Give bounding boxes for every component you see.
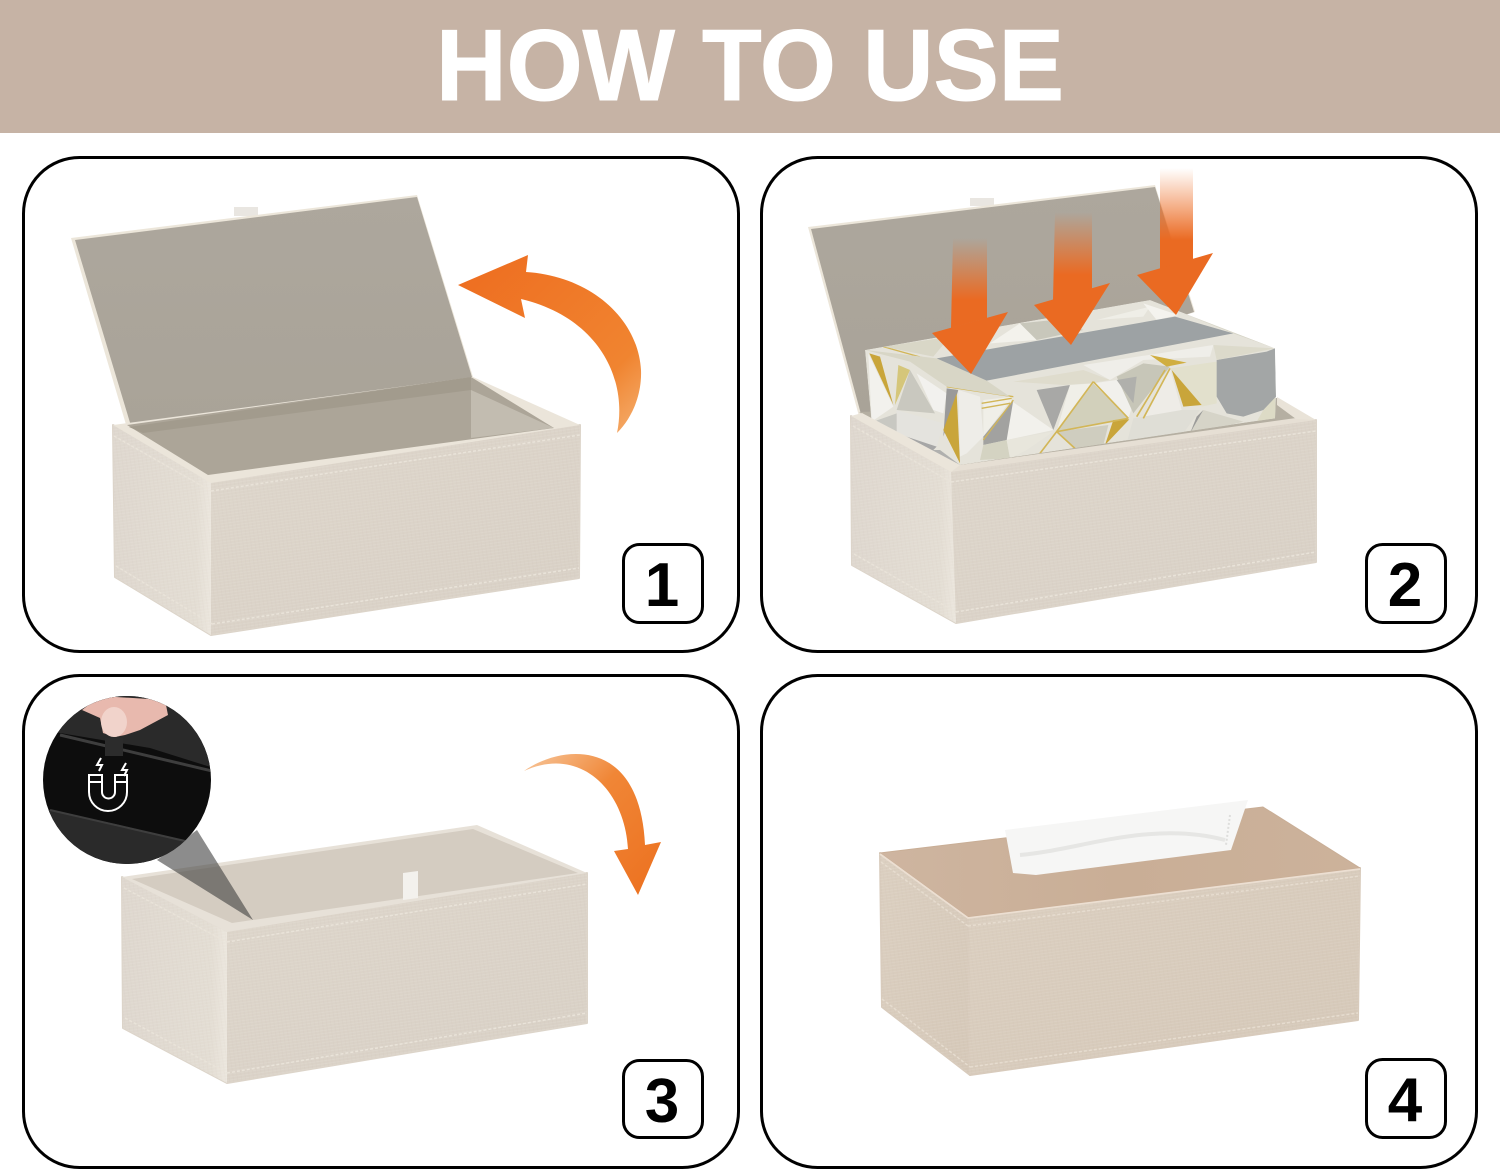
step badge 2: 2 — [1388, 551, 1422, 620]
step badge 4 — [1366, 1060, 1446, 1138]
arrow: middle insert arrow — [1034, 212, 1110, 345]
panel: step 3 close the lid — [24, 676, 738, 1168]
tissue box right face pattern — [1007, 345, 1276, 453]
icon: magnet — [89, 758, 127, 811]
panel: step 1 open the lid — [24, 158, 738, 652]
lid tab — [970, 198, 994, 206]
title: HOW TO USE — [436, 10, 1064, 122]
step badge 1: 1 — [645, 551, 679, 620]
step badge 4: 4 — [1388, 1066, 1423, 1135]
arrow: curved close arrow — [524, 754, 661, 895]
tissue holder box — [880, 807, 1360, 1075]
box interior — [859, 398, 1296, 466]
arrow: left insert arrow — [932, 238, 1008, 374]
tissue brand panel — [1217, 348, 1276, 417]
header banner — [0, 0, 1500, 133]
step badge 3 — [624, 1060, 702, 1138]
closed lid — [122, 825, 587, 932]
fingers — [82, 696, 168, 737]
step badge 1 — [624, 544, 702, 622]
open lid — [71, 195, 473, 428]
box body — [851, 397, 1316, 623]
tissue box — [865, 300, 1276, 465]
panel: step 4 ready to use — [762, 676, 1476, 1168]
tissue box top face — [865, 303, 1275, 397]
tissue box left face pattern — [868, 346, 1014, 464]
panel: step 2 insert tissue box — [762, 158, 1476, 652]
step badge 2 — [1366, 544, 1446, 622]
callout: magnet close-up — [43, 696, 211, 864]
box interior — [127, 377, 554, 475]
step badge 3: 3 — [645, 1067, 679, 1136]
open lid — [808, 185, 1195, 420]
closed box — [122, 825, 587, 1083]
lid tab — [403, 871, 418, 900]
box body — [113, 377, 580, 635]
tissue box grey label band — [937, 317, 1233, 381]
wooden top — [880, 807, 1360, 917]
arrow: curved lift arrow — [458, 255, 641, 433]
lid tab — [234, 207, 258, 216]
tissue — [1005, 800, 1248, 875]
callout cone — [157, 830, 253, 920]
arrow: right insert arrow — [1137, 168, 1213, 315]
